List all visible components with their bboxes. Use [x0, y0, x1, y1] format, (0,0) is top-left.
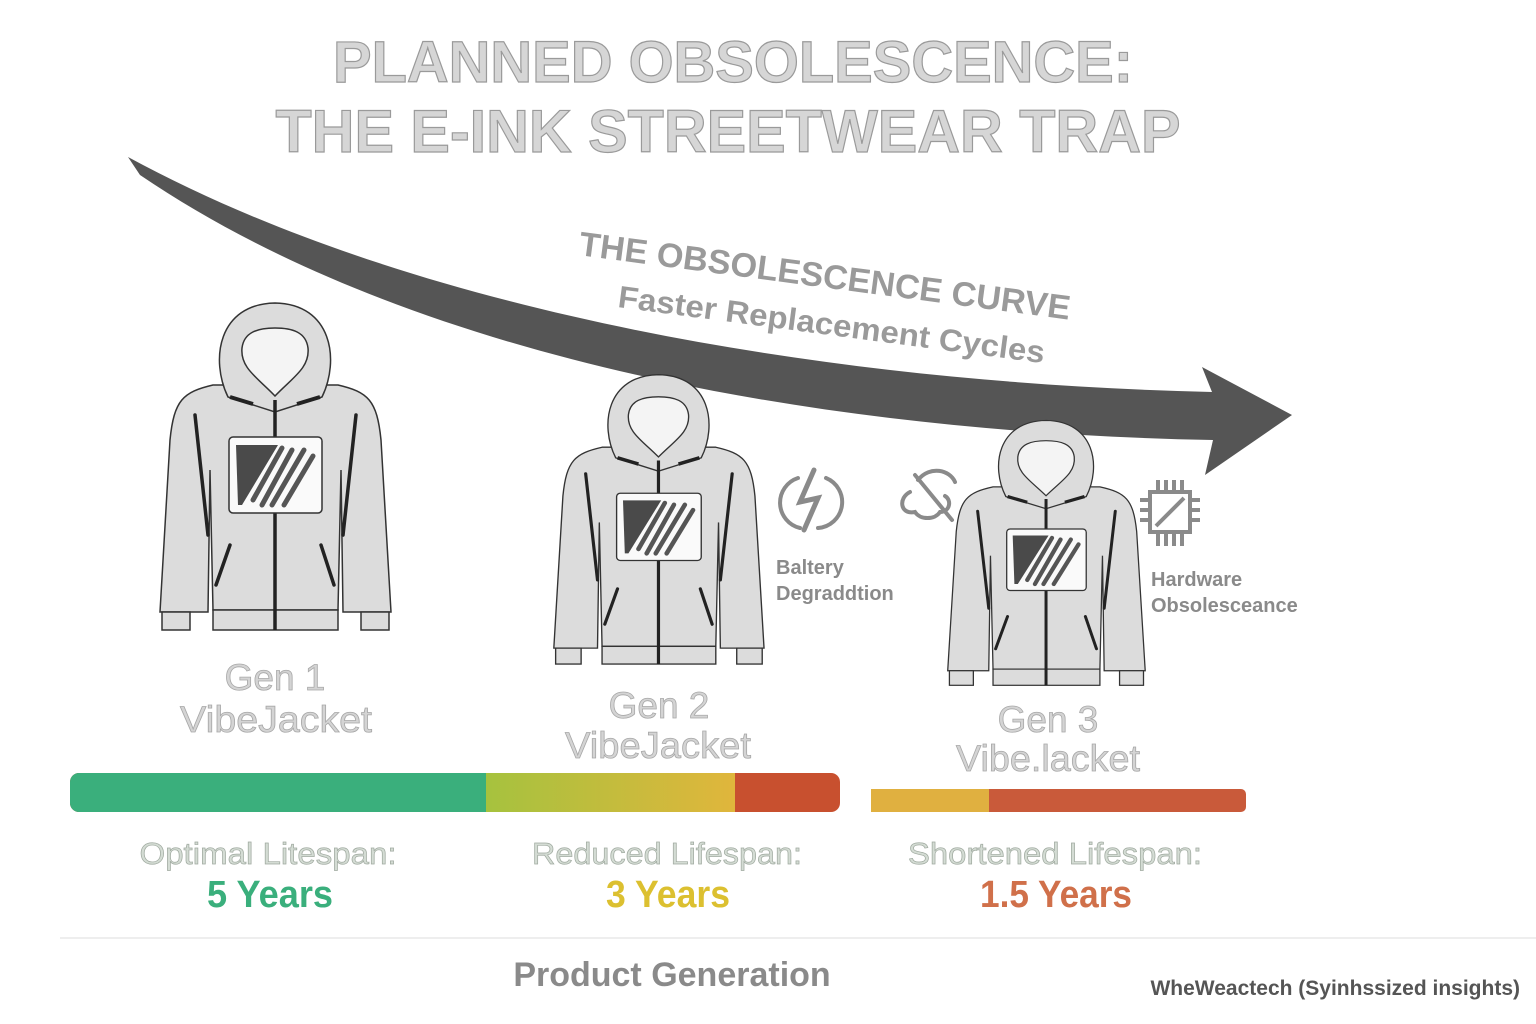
gen labels: VibeJacket: [180, 699, 373, 740]
jacket: gen 3: [948, 420, 1145, 685]
lifespan texts: 3 Years: [606, 874, 730, 916]
lifespan texts: Optimal Litespan:: [140, 836, 396, 871]
gen labels: [180, 657, 1141, 779]
jacket: gen 2: [554, 375, 764, 664]
lifespan texts: Shortened Lifespan:: [908, 836, 1202, 871]
icon label: battery: Degraddtion: [776, 583, 894, 605]
icon label: battery: Baltery: [776, 557, 845, 579]
icon: cloud slash: [902, 471, 955, 520]
arrow label: [577, 225, 1073, 370]
source credit: WheWeactech (Syinhssized insights): [1150, 977, 1520, 1000]
jacket: gen 1: [160, 303, 391, 630]
icon label: battery: [776, 557, 894, 605]
icon: battery lightning: [780, 470, 842, 530]
gen labels: Gen 1: [225, 657, 325, 698]
lifespan texts: 1.5 Years: [980, 874, 1132, 916]
arrow label: THE OBSOLESCENCE CURVE: [577, 225, 1073, 328]
gen labels: Vibe.lacket: [956, 738, 1141, 779]
lifespan bar 1: [70, 773, 840, 812]
icon label: hardware: [1151, 569, 1298, 617]
gen labels: Gen 3: [998, 699, 1098, 740]
lifespan bar 2: [871, 789, 1246, 812]
icon label: hardware: Hardware: [1151, 569, 1242, 591]
title: PLANNED OBSOLESCENCE:: [333, 30, 1133, 95]
icon label: hardware: Obsolesceance: [1151, 595, 1298, 617]
title: THE E-INK STREETWEAR TRAP: [276, 98, 1180, 165]
gen labels: Gen 2: [609, 685, 709, 726]
title: [276, 30, 1180, 165]
gen labels: VibeJacket: [565, 725, 752, 766]
icon: chip: [1140, 480, 1200, 546]
lifespan texts: 5 Years: [207, 874, 333, 916]
lifespan texts: Reduced Lifespan:: [532, 836, 802, 871]
arrow label: Faster Replacement Cycles: [616, 279, 1047, 370]
axis label: Product Generation: [513, 956, 831, 994]
lifespan texts: [140, 836, 1202, 916]
arrow: obsolescence curve: [128, 157, 1292, 475]
